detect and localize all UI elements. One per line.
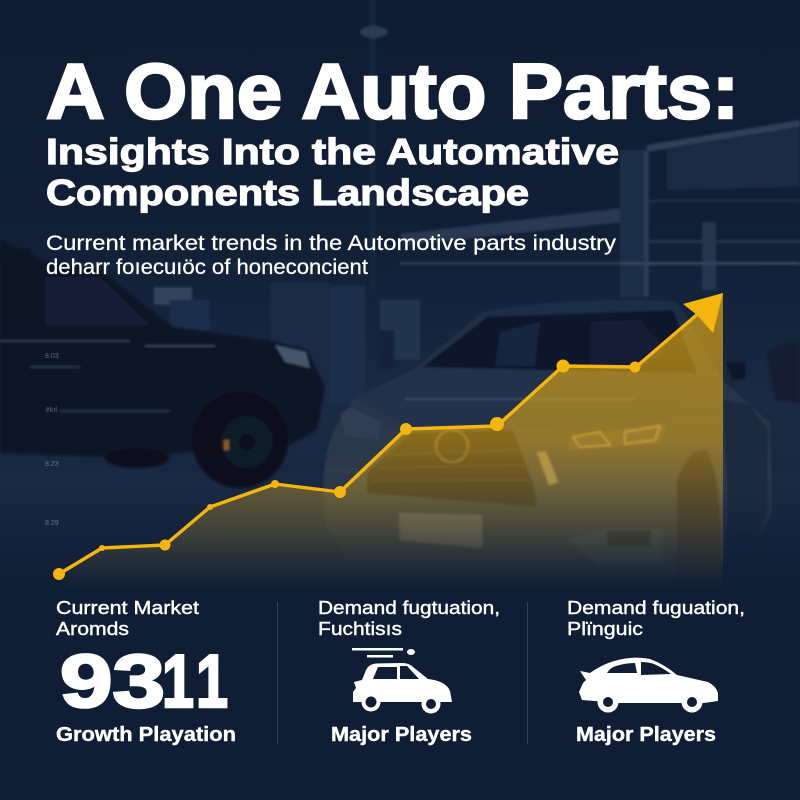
stat label [56,598,199,639]
stat number: 1 [196,639,228,723]
faint axis labels [45,353,59,527]
stat number: 1 [162,639,194,723]
stat label: Aromds [56,619,129,639]
growth line chart [45,293,723,590]
text block: description [46,232,617,279]
grille [367,430,537,507]
ceiling and rear wall structure [0,0,800,412]
title: A One Auto Parts: [46,47,739,135]
panel label: Fuchtisıs [318,619,402,639]
dark SUV on the left [0,240,325,488]
heading: subtitle: Components Landscape [46,172,529,213]
icon: hatchback car with speed lines [352,648,452,714]
heading: subtitle: Insights Into the Automative [46,131,619,172]
panel label: Plïnguic [567,619,643,639]
text block: description: deharr foıecuıöc of honeconcient [46,256,368,279]
chart area fill [59,293,723,590]
panel caption: Major Players [576,724,716,746]
stat number [60,639,228,723]
panel caption: Major Players [331,724,472,746]
stat caption: Growth Playation [56,724,236,746]
icon: sedan car [579,658,718,712]
license plate [399,513,482,548]
floor [0,470,800,590]
hood [355,372,697,427]
faint axis labels: 8.03 [45,353,59,360]
panel label: Demand fuguation, [567,598,745,618]
faint axis labels: 8.23 [45,461,59,468]
main car front view [323,300,772,585]
panel: market stat [56,598,236,746]
panel: demand two [567,598,745,746]
background car, right [767,342,800,403]
headlights [340,408,382,440]
panel label [318,598,500,639]
faint axis labels: ēkıl [46,407,57,414]
windshield [423,310,697,373]
panel label [567,598,745,639]
panel label: Demand fugtuation, [318,598,500,618]
stat label: Current Market [56,598,199,618]
faint axis labels: 8.29 [45,520,59,527]
right wheel arch [677,449,722,585]
data points [53,360,640,580]
lower bumper [567,528,663,566]
text block: description: Current market trends in the Automotive parts industry [46,232,617,255]
heading: subtitle [46,131,619,213]
stat number: 93 [60,639,165,723]
trend line [59,312,700,574]
panel: demand one [318,598,500,746]
arrow head [683,293,723,333]
scrims [0,490,800,588]
